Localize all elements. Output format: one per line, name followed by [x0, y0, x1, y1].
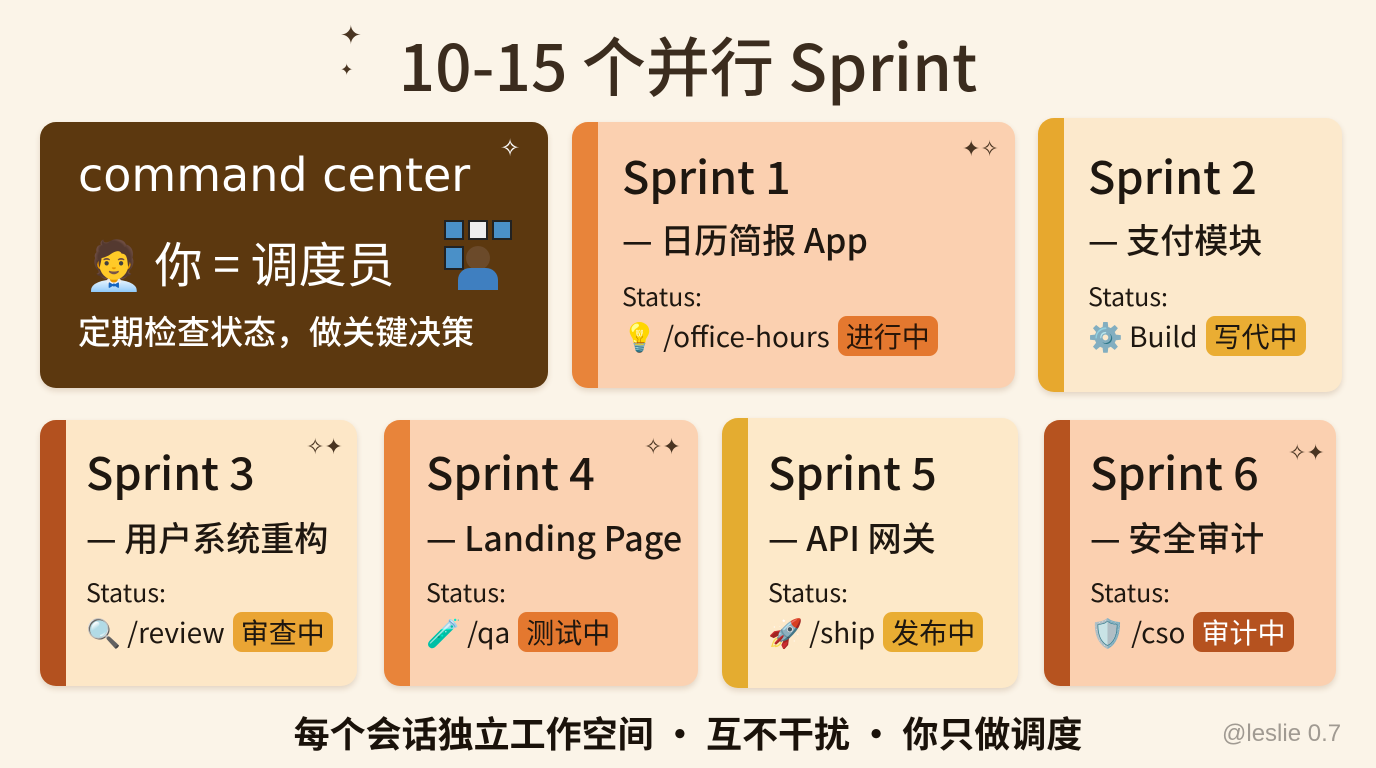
panel: Sprint 2: Sprint 2 — [1088, 142, 1257, 207]
panel: Sprint 1 — [572, 122, 1015, 388]
panel: command center: ✧ — [500, 135, 520, 162]
panel: Sprint 5: 🚀 /ship — [768, 612, 875, 652]
panel: Sprint 6: ✧✦ — [1288, 440, 1325, 465]
title: 10-15 个并行 Sprint — [399, 18, 977, 110]
panel: Sprint 6: Status: — [1090, 574, 1170, 610]
panel: Sprint 6 — [1044, 420, 1336, 686]
icon: monitors — [444, 220, 512, 290]
panel: Sprint 3: 🔍 /review — [86, 612, 225, 652]
panel: Sprint 4: 🧪 /qa — [426, 612, 510, 652]
panel: Sprint 2: ⚙️ Build — [1088, 316, 1198, 356]
panel: Sprint 6: — 安全审计 — [1090, 512, 1264, 561]
panel: Sprint 4: Status: — [426, 574, 506, 610]
panel: Sprint 3 — [40, 420, 357, 686]
subtitle: — 日历简报 App — [622, 214, 868, 263]
panel: Sprint 2: 写代中 — [1214, 316, 1298, 356]
panel: Sprint 5: — API 网关 — [768, 512, 936, 561]
panel: Sprint 3: Status: — [86, 574, 166, 610]
sparkle decoration: ✦ — [340, 62, 353, 79]
text: description: 定期检查状态，做关键决策 — [78, 306, 474, 354]
panel: Sprint 1: ✦✧ — [962, 136, 999, 161]
status label: Status: — [622, 278, 702, 314]
status row: 进行中 — [846, 316, 930, 356]
panel: Sprint 3: Sprint 3 — [86, 438, 255, 503]
panel: command center — [40, 122, 548, 388]
heading: command center: command center — [78, 148, 470, 202]
status row: 💡 /office-hours — [622, 316, 830, 356]
panel: Sprint 3: 审查中 — [241, 612, 325, 652]
panel: Sprint 4: 测试中 — [526, 612, 610, 652]
heading: Sprint 1 — [622, 142, 791, 207]
panel: Sprint 5: Sprint 5 — [768, 438, 937, 503]
panel: Sprint 5: 发布中 — [891, 612, 975, 652]
watermark: @leslie 0.7 — [1222, 720, 1341, 747]
panel: Sprint 4 — [384, 420, 698, 686]
panel: Sprint 6: Sprint 6 — [1090, 438, 1259, 503]
panel: Sprint 2: — 支付模块 — [1088, 214, 1262, 263]
panel: Sprint 5 — [722, 418, 1018, 688]
panel: Sprint 6: 审计中 — [1201, 612, 1286, 652]
panel: Sprint 4: Sprint 4 — [426, 438, 595, 503]
footer text: 每个会话独立工作空间 · 互不干扰 · 你只做调度 — [294, 706, 1082, 758]
panel: Sprint 3: ✧✦ — [306, 434, 343, 459]
panel: Sprint 4: — Landing Page — [426, 512, 682, 561]
sparkle decoration: ✦ — [340, 20, 362, 50]
panel: Sprint 3: — 用户系统重构 — [86, 512, 328, 561]
text: 你 = 调度员: 🧑‍💼 你 = 调度员 — [84, 226, 395, 296]
panel: Sprint 2: Status: — [1088, 278, 1168, 314]
panel: Sprint 4: ✧✦ — [644, 434, 681, 459]
sparkle decoration — [340, 20, 362, 79]
panel: Sprint 6: 🛡️ /cso — [1090, 612, 1185, 652]
status row — [622, 316, 938, 356]
panel: Sprint 5: Status: — [768, 574, 848, 610]
panel: Sprint 2 — [1038, 118, 1342, 392]
